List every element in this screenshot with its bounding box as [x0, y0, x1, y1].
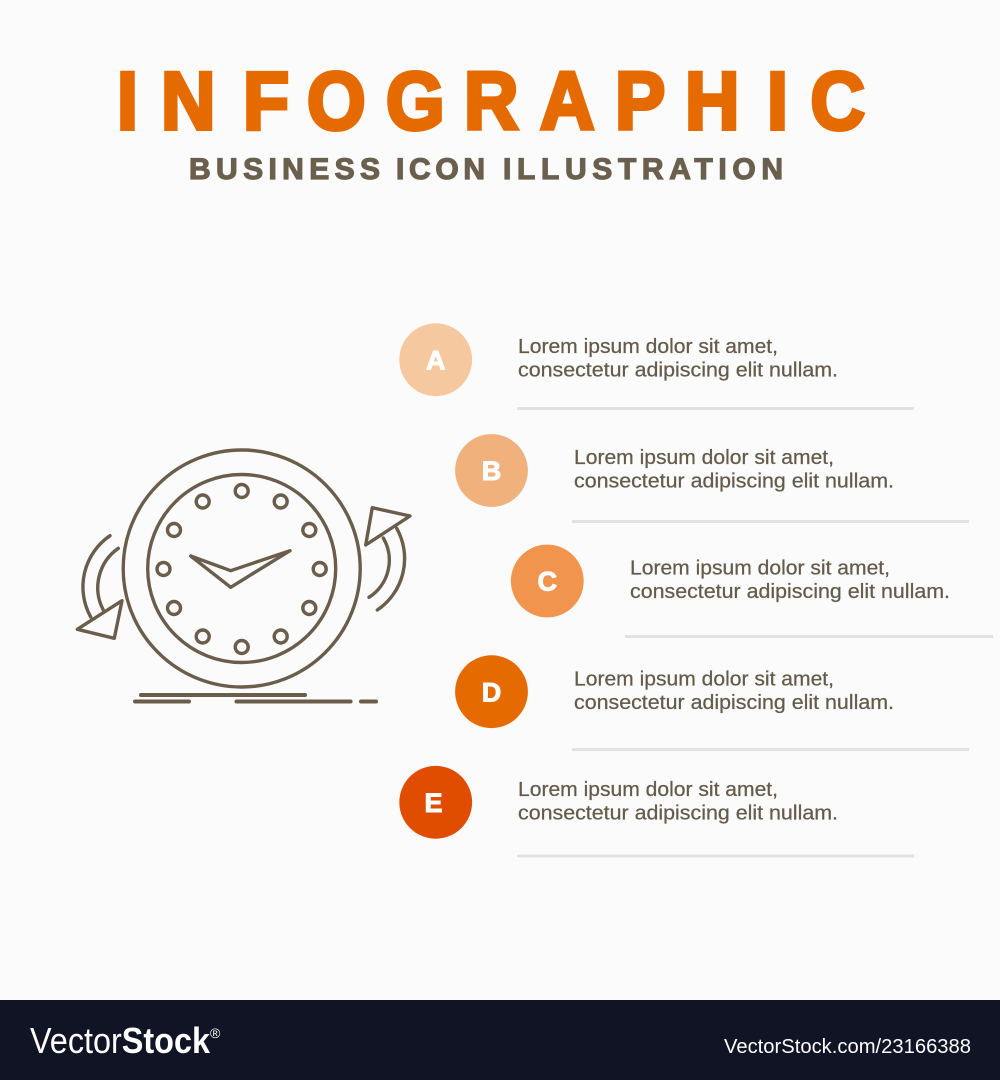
step C: C — [538, 566, 557, 596]
badge B — [455, 434, 528, 507]
badge A — [399, 323, 472, 396]
step E — [399, 766, 914, 858]
step C — [511, 545, 993, 638]
title: INFOGRAPHIC — [117, 55, 865, 147]
footer bar — [0, 1000, 1000, 1080]
ground lines — [135, 695, 376, 702]
text A: Lorem ipsum dolor sit amet, — [518, 336, 778, 358]
text E: Lorem ipsum dolor sit amet, — [518, 779, 778, 801]
step B — [455, 434, 969, 523]
step E: E — [424, 788, 443, 818]
text E: consectetur adipiscing elit nullam. — [518, 802, 838, 824]
text B: consectetur adipiscing elit nullam. — [574, 470, 894, 492]
step A: A — [426, 346, 445, 376]
step D: D — [482, 678, 501, 708]
subtitle: ICON — [396, 153, 485, 186]
badge C — [511, 545, 584, 617]
hour markers — [157, 484, 326, 654]
subtitle: BUSINESS — [189, 153, 380, 186]
step D — [455, 655, 969, 751]
right arrow — [366, 508, 410, 610]
icon: clock with circular arrows — [77, 450, 410, 702]
text C: consectetur adipiscing elit nullam. — [630, 581, 950, 603]
clock inner ring — [148, 474, 336, 662]
logo: VectorStock — [30, 1020, 211, 1061]
text D: Lorem ipsum dolor sit amet, — [574, 668, 834, 690]
left arrow — [77, 536, 122, 638]
clock outer ring — [123, 450, 360, 687]
subtitle: ILLUSTRATION — [503, 153, 783, 186]
step B: B — [482, 456, 501, 486]
badge E — [399, 766, 472, 839]
image id: VectorStock.com/23166388 — [724, 1036, 971, 1058]
text D: consectetur adipiscing elit nullam. — [574, 692, 894, 714]
text C: Lorem ipsum dolor sit amet, — [630, 558, 890, 580]
step A — [399, 323, 914, 410]
badge D — [455, 655, 528, 728]
text B: Lorem ipsum dolor sit amet, — [574, 447, 834, 469]
text A: consectetur adipiscing elit nullam. — [518, 360, 838, 382]
clock hands — [191, 551, 290, 587]
footer bar: ® — [210, 1025, 221, 1041]
